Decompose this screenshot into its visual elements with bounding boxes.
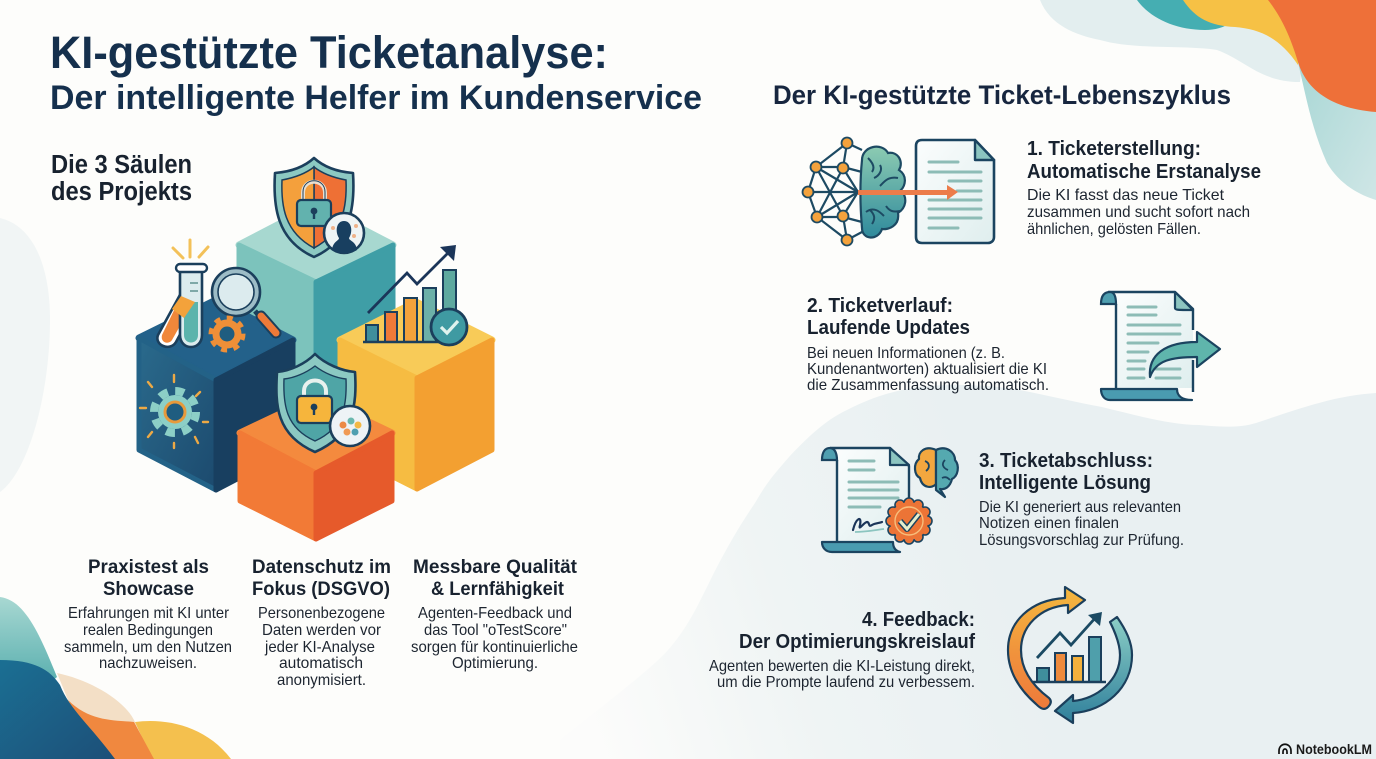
pillar 2 text: Daten werden vor (262, 622, 382, 639)
step 2 text: Kundenantworten) aktualisiert die KI (807, 361, 1047, 378)
bars (1037, 668, 1049, 682)
step 3 text: Intelligente Lösung (979, 472, 1151, 494)
pillar 2 text: anonymisiert. (277, 672, 366, 689)
cube: navy left (139, 300, 293, 490)
pillar 3 text (411, 557, 578, 672)
step 2 text: Bei neuen Informationen (z. B. (807, 345, 1005, 362)
title: Der intelligente Helfer im Kundenservice (50, 79, 702, 117)
heading: pillars (51, 151, 192, 206)
illustration: three pillars cubes (139, 158, 492, 539)
title (50, 27, 702, 117)
step 4 text: Agenten bewerten die KI-Leistung direkt, (709, 658, 975, 675)
pillar 2 text: Personenbezogene (258, 605, 385, 622)
decoration: top right blobs (1137, 0, 1376, 200)
pillar 2 text: Datenschutz im (252, 557, 391, 578)
step 2 text: die Zusammenfassung automatisch. (807, 377, 1049, 394)
step 3 text: 3. Ticketabschluss: (979, 450, 1153, 472)
step 4 text: um die Prompte laufend zu verbessem. (717, 674, 975, 691)
network (808, 143, 862, 240)
heading: pillars: Die 3 Säulen (51, 151, 192, 179)
step 4 text: 4. Feedback: (862, 609, 975, 631)
icon: shield top with lock (275, 158, 364, 257)
pillar 3 text: das Tool "oTestScore" (424, 622, 567, 639)
step 4 text (709, 609, 975, 691)
pillar 2 text: Fokus (DSGVO) (252, 579, 390, 600)
icon: magnifier (212, 268, 276, 333)
pillar 2 text: jeder KI-Analyse (264, 639, 375, 656)
pillar 1 text: Showcase (103, 579, 194, 600)
arrow (858, 185, 958, 200)
pillar 1 text: Erfahrungen mit KI unter (68, 605, 230, 622)
step 4 text: Der Optimierungskreislauf (739, 631, 975, 653)
icon: document with update arrow (1101, 292, 1220, 400)
pillar 3 text: Agenten-Feedback und (418, 605, 572, 622)
cube: yellow right (340, 302, 492, 489)
step 1 text (1027, 138, 1261, 238)
heading: lifecycle: Der KI-gestützte Ticket-Lebenszyklus (773, 80, 1231, 110)
teal arc arrow (1055, 617, 1132, 723)
icon: flask (157, 240, 208, 347)
pillar 3 text: Optimierung. (452, 655, 538, 672)
heading: pillars: des Projekts (51, 178, 192, 206)
step 3 text: Notizen einen finalen (979, 515, 1119, 532)
step 2 text: Laufende Updates (807, 317, 970, 339)
pillar 1 text (64, 557, 232, 672)
pillar 1 text: realen Bedingungen (83, 622, 213, 639)
pillar 1 text: sammeln, um den Nutzen (64, 639, 232, 656)
step 1 text: zusammen und sucht sofort nach (1027, 204, 1250, 221)
icon: small orange gear (211, 318, 243, 350)
pillar 1 text: nachzuweisen. (99, 655, 197, 672)
document (916, 140, 994, 243)
pillar 3 text: Messbare Qualität (413, 557, 578, 578)
icon: brain network to document (802, 138, 994, 246)
step 3 text (979, 450, 1184, 549)
pillar 1 text: Praxistest als (88, 557, 209, 578)
decoration: bottom left blobs (0, 597, 231, 759)
orange arc arrow (1008, 587, 1085, 709)
step 3 text: Lösungsvorschlag zur Prüfung. (979, 532, 1184, 549)
step 1 text: ähnlichen, gelösten Fällen. (1027, 221, 1201, 238)
icon: optimization loop (1008, 587, 1132, 723)
step 1 text: Automatische Erstanalyse (1027, 161, 1261, 183)
icon: gear on navy cube (140, 375, 208, 448)
pillar 3 text: & Lernfähigkeit (431, 579, 565, 600)
pillar 2 text (252, 557, 391, 689)
step 2 text (807, 295, 1049, 394)
icon: shield front with lock (276, 354, 370, 452)
step 3 text: Die KI generiert aus relevanten (979, 499, 1181, 516)
pillar 3 text: sorgen für kontinuierliche (411, 639, 578, 656)
cube: teal back (239, 205, 393, 400)
pillar 2 text: automatisch (279, 655, 363, 672)
brain (860, 147, 905, 238)
step 2 text: 2. Ticketverlauf: (807, 295, 953, 317)
title: KI-gestützte Ticketanalyse: (50, 27, 608, 78)
step 1 text: 1. Ticketerstellung: (1027, 138, 1201, 160)
cube: orange front (240, 397, 392, 539)
icon: bar chart with arrow (363, 245, 467, 345)
step 1 text: Die KI fasst das neue Ticket (1027, 187, 1225, 204)
icon: signed document with badge and brain (822, 448, 958, 552)
